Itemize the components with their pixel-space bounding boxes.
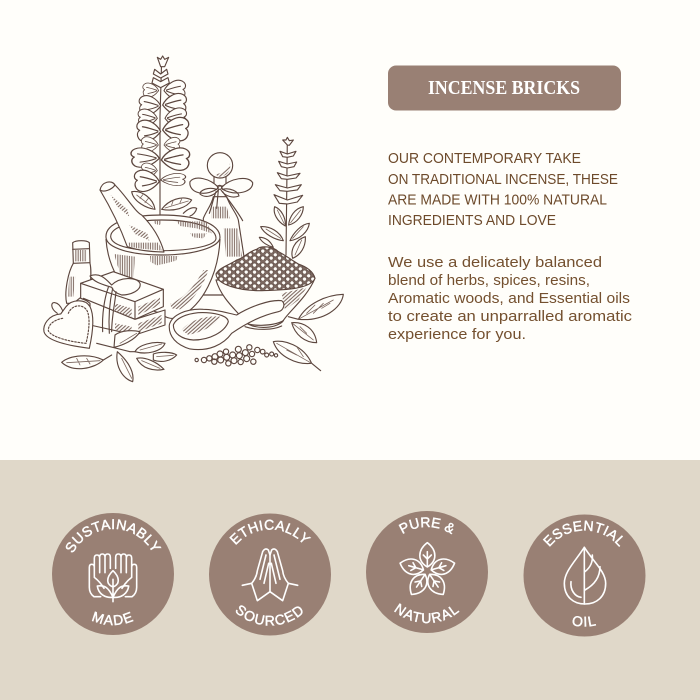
spoon with powder xyxy=(169,301,284,350)
body paragraph: blend of herbs, spices, resins, xyxy=(388,273,590,289)
badge: essential oil xyxy=(524,514,646,636)
heading paragraph: ARE MADE WITH 100% NATURAL xyxy=(388,192,607,208)
icon: praying hands xyxy=(242,549,298,601)
small glass bottle xyxy=(66,241,91,303)
badge: essential oil: OIL xyxy=(572,616,596,627)
badge: sustainably made: MADE xyxy=(92,611,134,626)
badge: pure and natural xyxy=(366,511,488,633)
title pill: INCENSE BRICKS xyxy=(428,78,580,99)
icon: five leaves xyxy=(398,543,457,599)
icon: leaf oil drop xyxy=(564,547,606,604)
body paragraph xyxy=(388,255,632,343)
botanical illustration: mortar, herbs, soap, seeds xyxy=(44,56,343,382)
page background xyxy=(0,0,700,460)
heading paragraph: INGREDIENTS AND LOVE xyxy=(388,213,556,229)
soap bricks with twine xyxy=(81,272,165,335)
badge: ethically sourced: ETHICALLY xyxy=(229,520,312,545)
heart sachet xyxy=(44,301,93,348)
badge: ethically sourced xyxy=(209,514,331,636)
badge: essential oil: ESSENTIAL xyxy=(542,520,623,547)
body paragraph: to create an unparralled aromatic xyxy=(388,309,632,325)
heading paragraph xyxy=(388,151,618,229)
seed bowl xyxy=(216,247,315,329)
badge: pure and natural: PURE & xyxy=(398,517,454,534)
badge: ethically sourced: SOURCED xyxy=(236,605,303,626)
rear bottle with bow xyxy=(190,153,253,295)
tall flowering plant xyxy=(131,56,197,216)
heading paragraph: OUR CONTEMPORARY TAKE xyxy=(388,151,581,167)
body paragraph: experience for you. xyxy=(388,327,526,343)
badge: pure and natural: NATURAL xyxy=(394,603,460,624)
mortar bowl xyxy=(106,215,220,318)
scattered seeds xyxy=(195,345,278,366)
icon: hands holding plant xyxy=(89,554,137,602)
pestle xyxy=(100,182,164,252)
bottom left sprig xyxy=(62,331,177,382)
heading paragraph: ON TRADITIONAL INCENSE, THESE xyxy=(388,172,618,188)
body paragraph: We use a delicately balanced xyxy=(388,255,602,271)
title pill xyxy=(388,66,621,110)
badge: sustainably made: SUSTAINABLY xyxy=(66,519,162,552)
bottom beige band xyxy=(0,460,700,700)
right side leaves xyxy=(273,294,343,371)
small flowering plant xyxy=(259,137,309,258)
badge: sustainably made xyxy=(52,513,174,635)
body paragraph: Aromatic woods, and Essential oils xyxy=(388,291,630,307)
